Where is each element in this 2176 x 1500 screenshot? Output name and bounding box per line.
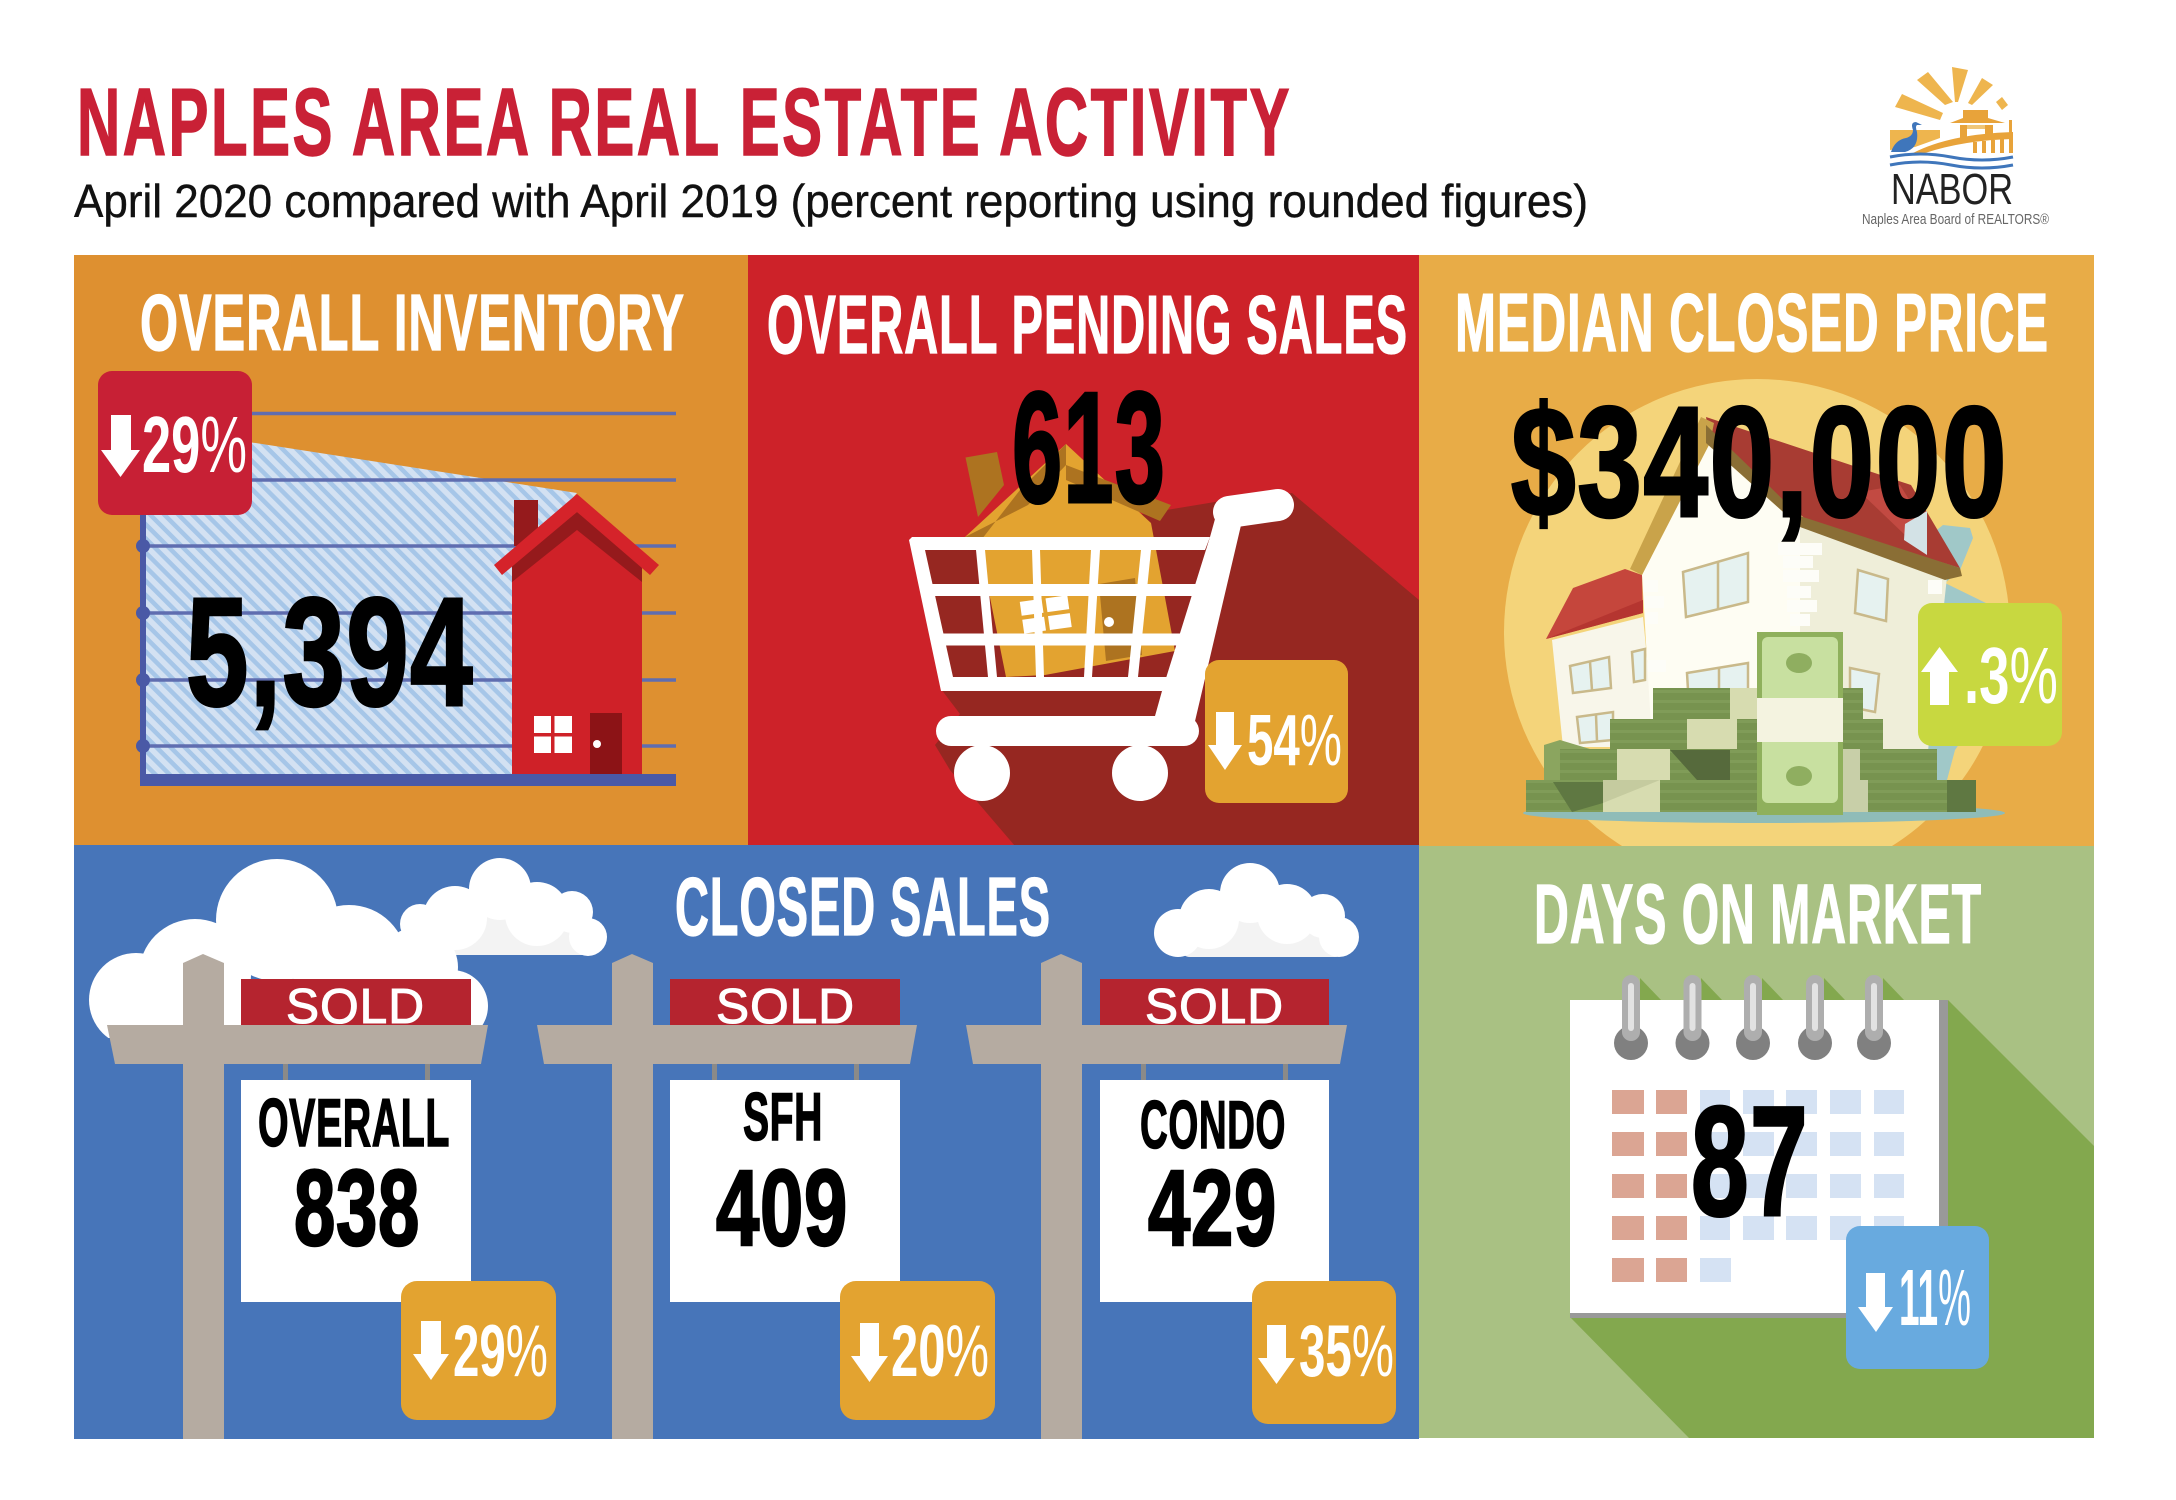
sign: condo: SOLD [1145, 980, 1284, 1034]
badge: down 11% [1846, 1226, 1989, 1369]
logo: NABOR [1862, 67, 2049, 228]
badge: condo down 35%: 35% [1299, 1311, 1394, 1392]
icon: cloud center [400, 858, 607, 956]
badge: up .3%: .3% [1964, 631, 2058, 720]
icon: cart shadow [925, 493, 1419, 846]
badge: overall down 29%: 29% [453, 1311, 548, 1392]
badge: down 29%: 29% [142, 400, 247, 489]
sign: overall: OVERALL [258, 1085, 450, 1161]
panel: days on market [1419, 846, 2094, 1438]
heading: overall pending sales: OVERALL PENDING SALES [767, 278, 1408, 371]
panel: closed sales [74, 845, 1419, 1439]
title: NAPLES AREA REAL ESTATE ACTIVITY [77, 69, 1292, 176]
value: 5,394: 5,394 [186, 566, 474, 738]
sign: single family homes: 409 [716, 1147, 848, 1268]
badge: condo down 35% [1252, 1281, 1396, 1424]
sign: single family homes: SFH [743, 1079, 823, 1155]
icon: calendar shadow [1570, 978, 2094, 1438]
chart: inventory area [136, 414, 676, 786]
icon: calendar [1570, 975, 1948, 1318]
sign: overall: SOLD [286, 980, 425, 1034]
panel: overall inventory [74, 255, 748, 846]
panel: median closed price [1419, 255, 2094, 885]
icon: cloud right [1154, 863, 1359, 957]
icon: shopping cart [909, 501, 1278, 801]
sign: single family homes: SOLD [716, 980, 855, 1034]
sign: single family homes [537, 954, 917, 1439]
badge: sfh down 20% [840, 1281, 995, 1420]
badge: down 54%: 54% [1247, 701, 1342, 781]
heading: overall inventory: OVERALL INVENTORY [140, 278, 685, 367]
logo: NABOR: NABOR [1891, 165, 2013, 214]
panel: overall pending sales [748, 255, 1419, 846]
badge: up .3% [1918, 603, 2062, 746]
icon: house with money [1523, 417, 2005, 823]
badge: sfh down 20%: 20% [891, 1311, 989, 1392]
heading: closed sales: CLOSED SALES [675, 860, 1051, 953]
icon: tilted house in cart [965, 444, 1175, 677]
sign: condo: 429 [1148, 1147, 1277, 1268]
icon: red house [494, 494, 659, 774]
badge: down 29% [98, 371, 252, 515]
icon: cloud left [89, 859, 488, 1047]
value: 613: 613 [1012, 360, 1166, 536]
badge: down 54% [1205, 660, 1348, 803]
subtitle: April 2020 compared with April 2019 (percent reporting using rounded figures) [74, 175, 1588, 227]
sign: condo: CONDO [1140, 1087, 1286, 1163]
badge: overall down 29% [401, 1281, 556, 1420]
badge: down 11%: 11% [1899, 1253, 1971, 1342]
sign: overall: 838 [294, 1147, 420, 1268]
sign: overall [107, 954, 488, 1439]
value: 87: 87 [1691, 1075, 1809, 1249]
value: $340,000: $340,000 [1511, 375, 2008, 550]
logo: NABOR: Naples Area Board of REALTORS® [1862, 211, 2049, 228]
icon: sun circle [1504, 379, 2010, 885]
sign: condo [966, 954, 1347, 1439]
